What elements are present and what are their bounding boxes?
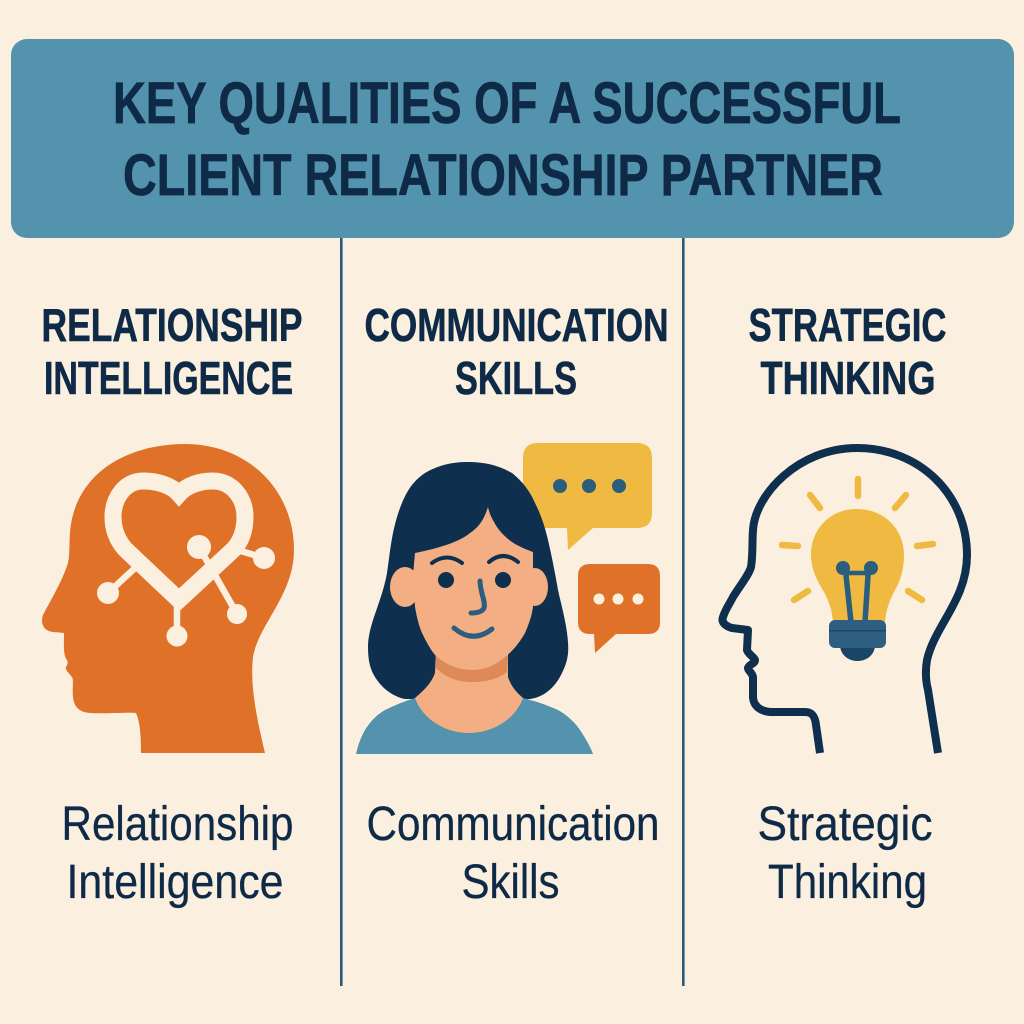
icon: head outline with light bulb [722,448,967,753]
column divider right [682,236,685,986]
neck shadow [436,652,508,682]
bulb cap [840,646,875,661]
icon: woman with speech bubbles [356,443,660,754]
caption: strategic thinking [758,798,932,909]
caption: communication skills [366,798,660,909]
bulb rays [782,479,933,600]
heading: strategic thinking [748,299,946,404]
heading: strategic thinking: THINKING [760,352,936,404]
filament [843,573,871,622]
title banner [11,39,1014,238]
caption: communication skills: Skills [462,856,560,909]
heading: relationship intelligence: RELATIONSHIP [42,299,302,351]
hair [368,462,568,699]
heading: communication skills: SKILLS [455,352,577,404]
caption: communication skills: Communication [366,798,660,851]
right ear [522,568,548,606]
network lines [108,547,264,636]
caption: strategic thinking: Strategic [758,798,932,851]
heading: relationship intelligence: INTELLIGENCE [44,352,293,404]
eyebrows and eyes [432,556,518,563]
speech bubble orange [578,564,660,653]
caption: relationship intelligence: Intelligence [66,856,284,909]
bulb base [829,620,886,648]
shirt [356,698,593,754]
nose and mouth [454,581,492,636]
caption: relationship intelligence: Relationship [62,798,294,851]
column divider left [340,236,343,986]
speech bubble yellow [523,443,652,550]
bulb glass [811,509,904,622]
face [413,507,533,670]
heading: communication skills: COMMUNICATION [364,299,668,351]
network nodes [97,535,275,646]
heart outline [113,481,245,600]
icon: orange head with heart network [42,444,294,753]
caption: relationship intelligence [62,798,294,909]
left ear [390,567,420,607]
heading: communication skills [364,299,668,404]
heading: strategic thinking: STRATEGIC [748,299,946,351]
heading: relationship intelligence [42,299,302,404]
neck [415,650,523,733]
caption: strategic thinking: Thinking [768,856,927,909]
